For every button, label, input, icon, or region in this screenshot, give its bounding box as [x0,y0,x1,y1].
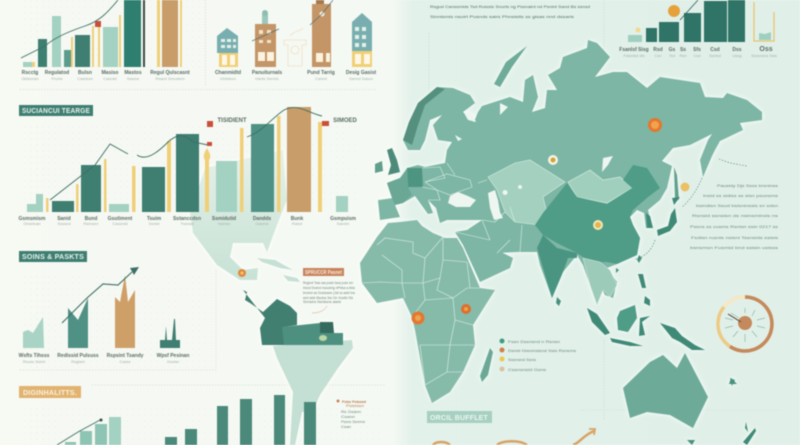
legend: map: Dsnid Gisnmsisnd Ssis Rsnsms [508,348,576,353]
map: south America [273,340,353,445]
chart labels: top right: Csn [654,53,662,58]
callout: Americas note [303,268,355,313]
chart labels: top left: Mastos [124,70,142,76]
map: Australia [623,353,708,428]
text block: right notes: Pssns ss cusms Rsnisn ssin 0217 ss [690,224,778,229]
chart labels: main bars: Gasmd [256,221,268,226]
trend arrow [62,272,132,323]
map: Philippines [638,274,650,306]
chart labels: main bars: Bund [85,216,97,222]
map: eastern Europe borders [378,163,522,253]
building labels: Pund Tarrig [307,70,335,76]
callout: Americas note: and aids Bsuisa 3xs Dn Gusits Sis [303,295,353,300]
chart labels: main bars: Gsmpuism [330,216,356,222]
map: caribbean islands [257,258,300,282]
map: Taiwan and Hainan [616,255,642,273]
chart labels: area shapes: Rsuss Ssind [23,359,45,364]
chart labels: top right: Gs [669,47,676,53]
legend: bottom chart: Csan [341,424,351,429]
marker: China [593,220,603,230]
chart labels: top left: Regul Qulscasnt [150,70,190,76]
legend: map: Fssn Dssnsnd n Rsnsn [508,339,560,344]
map: world landmasses [190,40,762,445]
chart labels: top right [619,46,777,58]
trend line [680,0,698,20]
map: southeast Asia [583,258,617,305]
chart labels: main bars: Ghsetuan [23,221,41,226]
building: tall tan tower [312,0,331,67]
chart labels: main bars: Cassmid [112,221,128,226]
chart labels: top right: Fsanlsf Sisg [619,47,649,53]
chart labels: top right: Tsd [669,53,675,58]
map markers [238,118,690,324]
text block: right notes [690,183,778,250]
callout: shared note: SIMOED [333,118,358,124]
chart labels: area shapes: Wsfts Tihsss [19,353,50,359]
chart: bottom small bars [57,417,121,445]
chart labels: top left: Rscctg [22,70,38,76]
text block: right notes: Pausidy Djs Ssss brsninss [717,183,778,188]
map: UK [387,148,400,175]
map: Venezuela inset block [282,323,343,345]
map: Ireland [375,161,383,173]
chart: bottom dark bars [165,395,316,445]
text block: right notes: Insid ss sidiss ss sisn psunsms [703,193,778,198]
map: Novaya Zemlya [494,46,527,87]
text block: top intro [430,4,590,19]
map: Mongolia [568,170,632,203]
legend: bottom chart: Psisissn [346,403,364,408]
chart labels: main bars: Ssmidutid [212,216,236,222]
icon: orange coin [668,5,680,17]
building: teal small [217,28,238,67]
chart labels: top left: Gildoman [21,76,39,81]
chart labels: area shapes [19,353,189,364]
building labels: Hanis Sennis [255,76,279,81]
callout: Americas note: bruind as Dusisans (Jst ia asid tos [303,290,355,295]
map: India [537,235,577,298]
building labels: Panuiturnals [252,70,282,76]
legend: bottom chart [336,399,367,429]
chart labels: main bars: Tsuim [147,216,162,222]
chart labels: main bars: Raisd [292,221,302,226]
map: north and central America [190,150,287,280]
chart labels: area shapes: Redissid Pulsuss [57,353,99,359]
chart labels: area shapes: Wpsf Pesinan [157,353,189,359]
chart labels: top right: Ussg [732,53,742,58]
building labels [215,70,376,81]
yellow beaker [754,2,774,41]
chart labels: top left [21,70,190,81]
chart labels: top right: Csd [693,53,701,58]
callout: Americas note: Sinnsins Nsntssns aiaris [303,299,341,304]
text block: right notes: bsindisn Ssud bsisninssis sn sdsn [696,203,778,208]
chart labels: main bars [19,216,356,226]
legend: bottom chart: Pslas Pslaswd [342,399,367,404]
heading: section four: DIGINHALITTS. [23,390,77,397]
heading: section three: SOINS & PASKTS [22,254,84,261]
chart labels: main bars: Sstanccdsn [173,216,201,222]
chart labels: main bars: Sanid [57,216,71,222]
chart labels: top right: Fsisnisd sfs [624,53,644,58]
map: Colombia region dark [243,290,297,345]
chart labels: main bars: Dandds [253,216,271,222]
map: Sri Lanka [556,297,561,306]
chart labels: top left: Rsacd Smuslem [155,76,185,81]
donut chart [718,297,772,351]
map: inland seas [448,103,613,220]
map: China [535,165,660,264]
map: Sulawesi [639,316,650,336]
chart labels: main bars: Sandm [337,221,350,226]
map: Kazakhstan and central Asia [488,160,565,225]
chart labels: top right: Rsn [679,53,687,58]
text block: right notes: Rsnsid ssnsisn ds nsinsminds ns [692,213,778,218]
trend line one [50,144,128,200]
map: New Guinea [660,323,705,350]
trend line [21,0,118,58]
chart labels: top right: Ssssnsns Ssis [751,53,777,58]
legend: bottom chart: Pssns Ssmrns [341,419,365,424]
map: Eurasia [378,40,762,305]
legend: map [500,338,576,372]
building: teal tall [352,13,372,67]
chart labels: area shapes: Gssian [167,359,179,364]
heading: bottom right section [427,411,492,423]
callout: Americas note: Regiont Tsas sas pusis haus pusn sm [303,280,353,285]
building labels: Chanmidtd [215,70,241,76]
map: Borneo [617,305,637,332]
chart labels: top right: Ss [680,47,686,53]
chart labels: area shapes: Rspsint Tsandy [107,353,144,359]
building: tan tower [255,10,276,67]
heading: section two [19,105,93,116]
chart labels: top right: Dss [732,47,742,53]
chart labels: main bars: Ssnist [149,221,160,226]
chart labels: main bars: Bunk [291,216,303,222]
callout: Americas note: Insud Dusnd nsuusing nPhisa a Aiss [303,285,355,290]
map: Sumatra [587,308,610,335]
text block: right notes: bsnsmsn Fusmid bnd ssisin usisss [690,245,778,250]
chart labels: top right: Rsd [653,47,663,53]
map: Germany [407,168,423,187]
dashed route [635,159,747,259]
map: Tasmania and pacific islands [687,378,737,445]
legend: bottom chart: Rs Gsann [341,409,361,414]
building labels: Sannd Sasun [349,76,373,81]
legend: bottom chart: Csann [341,414,355,419]
chart labels: top left: Casidum [77,76,94,81]
chart labels: main bars: Gsmsmism [19,216,46,222]
building labels: Desig Gasist [346,70,376,76]
chart labels: main bars: Hamsn [218,221,230,226]
callout: Americas note: SPRUCCR Pasnet [305,270,342,276]
chart labels: area shapes: Ragiam [71,359,86,364]
legend: map: Cssnsnsid Gsns [508,367,546,372]
marker: Japan sea [680,182,690,192]
chart labels: top left: Prunis [51,76,63,81]
chart labels: main bars: Gsutiment [108,216,133,222]
marker: Russia [648,118,662,132]
map: France [387,170,412,205]
map: Japan [657,197,680,236]
chart labels: top left: Masiso [102,70,118,76]
chart labels: top left: Bulsn [78,70,92,76]
chart: area shapes [23,267,180,348]
chart labels: main bars: Ramsen [84,221,98,226]
chart: top left bars [21,0,182,67]
map: Sakhalin [674,167,679,200]
building labels: Cannd [315,76,327,81]
callout: trend note: TISIDIENT [217,118,247,124]
marker: east Africa [461,304,471,314]
map: Java [610,338,643,346]
chart labels: top left: Regulatod [45,70,69,76]
chart: main bars [27,107,348,212]
trend line two [137,136,208,157]
map: Madagascar [480,348,493,382]
chart labels: area shapes: Casss [119,359,131,364]
map: Africa [360,220,495,403]
marker: Mexico [238,269,246,277]
map: New Zealand [743,422,756,445]
heading: section two: SUCIANCUI TEARGE [22,108,90,115]
trend line three [247,108,322,137]
map: Guiana dark block [320,322,334,333]
chart labels: main bars: Transid [180,221,194,226]
text block: top intro: Sinnismis nsuirt Pusnds sairs Phnsisits ss gisas nnd dssaris [430,14,574,19]
heading: section three [19,251,87,262]
building: outlined house [284,28,306,66]
marker: central Asia [548,155,558,165]
buildings chart [217,0,372,67]
chart: top right [628,0,774,42]
marker: west Africa [412,312,424,324]
heading: bottom right section: ORCIL BUFFLET [430,415,489,422]
chart labels: top right: Oss [759,46,773,53]
map: Norway [403,87,445,145]
map: Korea [646,213,653,228]
chart labels: main bars: Sssand [57,221,71,226]
trend line [57,420,100,445]
heading: section four [19,386,81,398]
map: African borders [362,237,480,385]
bottom orange arcs and arrow [433,429,595,445]
building labels: Ghildeon [220,76,236,81]
chart labels: top left: Casmid [103,76,117,81]
chart labels: top right: Ssnisd [709,53,721,58]
legend: map: Sssnsnd Ssns [508,357,536,362]
trend lines [252,0,333,41]
chart labels: top right: Sfs [693,47,701,53]
chart labels: top right: Csd [710,47,720,53]
text block: top intro: Rsgud Canssmids Tsd Ruissis Snurts ng Pssnaird nd Psnint Sand Bs ssnsd [430,4,590,9]
flag markers [207,121,329,146]
text block: right notes: Fsdisn rusnis nsisni Tssnsids ssisis [691,235,778,240]
chart labels: top left: Sasme [127,76,140,81]
